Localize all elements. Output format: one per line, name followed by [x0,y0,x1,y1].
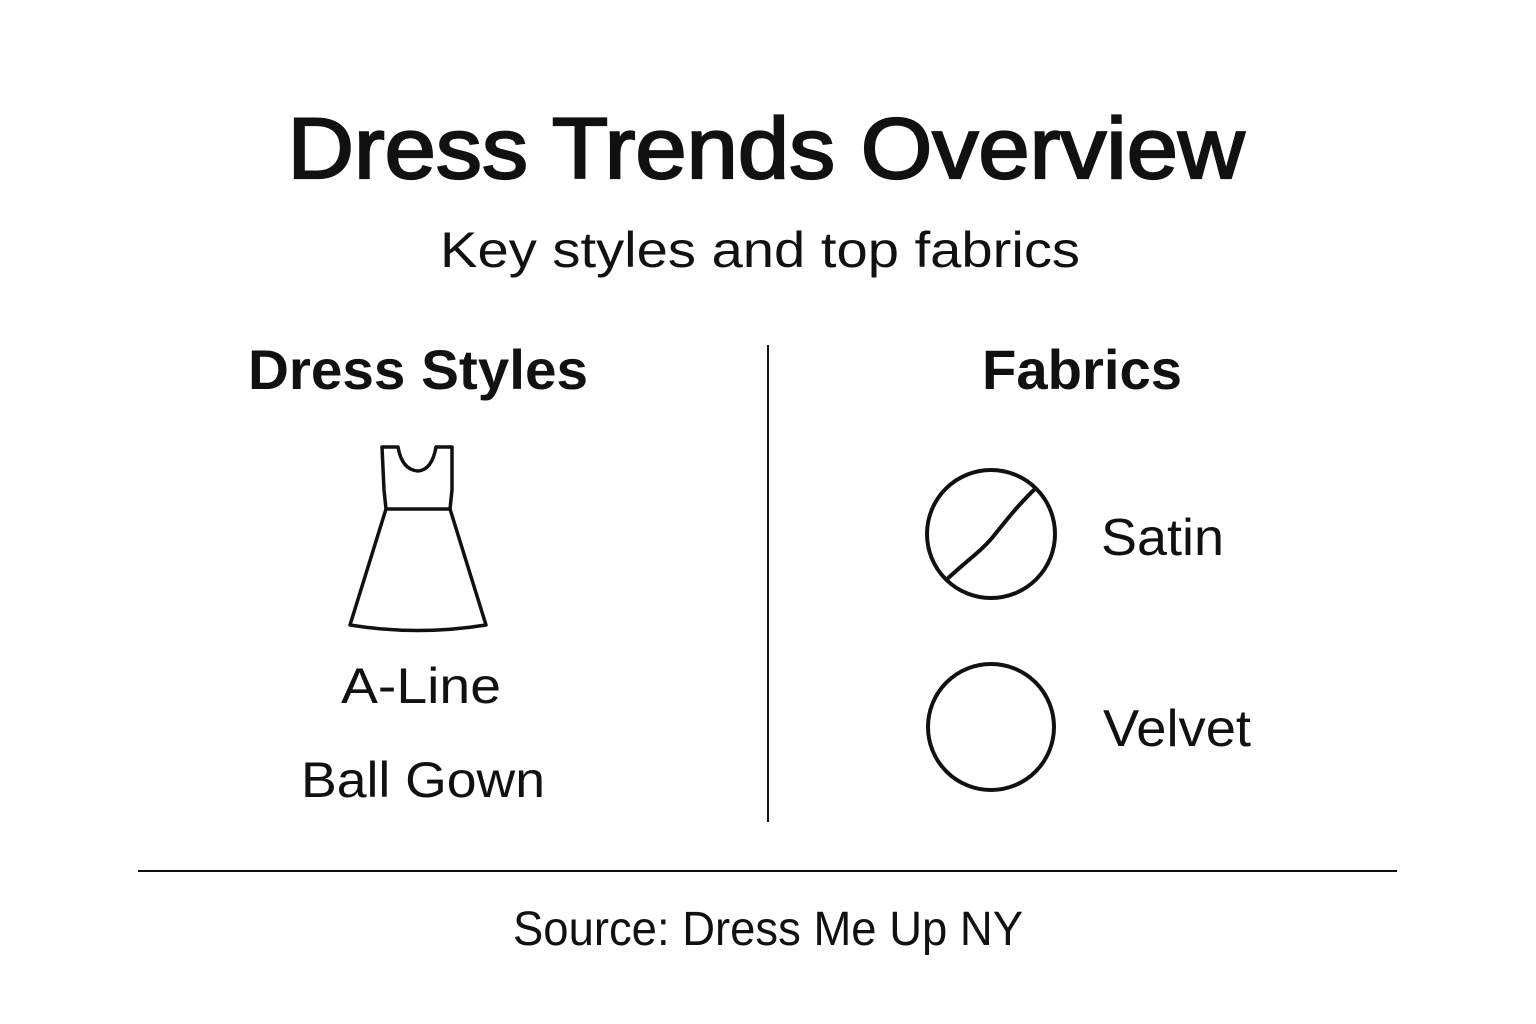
icon: a-line dress [350,447,486,630]
label: satin: Satin [1101,509,1224,567]
label: A-Line: A-Line [341,658,501,714]
subtitle: Key styles and top fabrics [440,222,1080,278]
icon: satin [927,470,1055,598]
heading: dress styles: Dress Styles [248,338,588,401]
title: Dress Trends Overview [288,101,1245,197]
panel: dress styles [301,447,545,808]
label: Ball Gown: Ball Gown [301,752,545,808]
icon: velvet [928,664,1054,790]
source: Source: Dress Me Up NY [513,903,1023,956]
heading: fabrics: Fabrics [982,338,1182,401]
panel: fabrics [927,470,1252,790]
label: velvet: Velvet [1103,700,1252,758]
